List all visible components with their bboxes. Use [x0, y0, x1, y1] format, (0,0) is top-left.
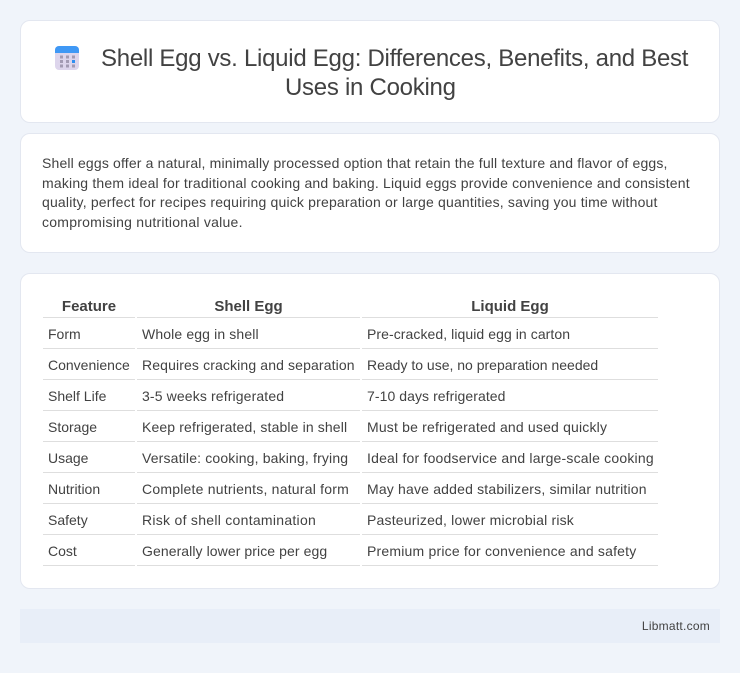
row: Usage: Versatile: cooking, baking, frying [142, 450, 348, 466]
row: Safety: Pasteurized, lower microbial risk [367, 512, 574, 528]
table header: Feature [62, 298, 116, 315]
panel: comparison table [20, 273, 720, 589]
row: Convenience: Requires cracking and separation [142, 357, 355, 373]
row: Usage [48, 450, 654, 466]
row: Cost [48, 543, 636, 559]
row: Storage [48, 419, 607, 435]
row: Usage: Usage [48, 450, 88, 466]
row: Convenience: Convenience [48, 357, 130, 373]
table header: Shell Egg [214, 298, 283, 315]
row: Safety [48, 512, 574, 528]
row: Safety: Risk of shell contamination [142, 512, 316, 528]
intro paragraph: compromising nutritional value. [42, 214, 243, 230]
table header: Liquid Egg [471, 298, 549, 315]
icon: calendar [55, 46, 79, 70]
title: Uses in Cooking [285, 74, 456, 101]
intro paragraph: making them ideal for traditional cooking and baking. Liquid eggs provide convenience and consistent [42, 175, 690, 191]
row: Safety: Safety [48, 512, 88, 528]
table header [62, 298, 549, 315]
row: Shelf Life: Shelf Life [48, 388, 106, 404]
row: Storage: Must be refrigerated and used quickly [367, 419, 607, 435]
panel: intro text [20, 133, 720, 253]
title [101, 45, 688, 101]
intro paragraph: quality, perfect for recipes requiring quick preparation or large quantities, saving you time without [42, 194, 658, 210]
title: Shell Egg vs. Liquid Egg: Differences, Benefits, and Best [101, 45, 688, 72]
intro paragraph: Shell eggs offer a natural, minimally processed option that retain the full texture and flavor of eggs, [42, 155, 668, 171]
row: Storage: Storage [48, 419, 97, 435]
footer bar [20, 609, 720, 643]
row: Shelf Life [48, 388, 506, 404]
row: Form: Form [48, 326, 81, 342]
row: Shelf Life: 3-5 weeks refrigerated [142, 388, 284, 404]
row: Form: Whole egg in shell [142, 326, 259, 342]
row: Nutrition: Nutrition [48, 481, 100, 497]
row: Cost: Generally lower price per egg [142, 543, 327, 559]
row: Usage: Ideal for foodservice and large-scale cooking [367, 450, 654, 466]
row: Form [48, 326, 570, 342]
row: Convenience [48, 357, 598, 373]
row: Storage: Keep refrigerated, stable in shell [142, 419, 347, 435]
row: Shelf Life: 7-10 days refrigerated [367, 388, 506, 404]
row: Nutrition: May have added stabilizers, similar nutrition [367, 481, 647, 497]
panel: title card [20, 20, 720, 123]
row: Cost: Premium price for convenience and safety [367, 543, 636, 559]
row: Nutrition [48, 481, 647, 497]
row: Nutrition: Complete nutrients, natural form [142, 481, 349, 497]
row: Convenience: Ready to use, no preparation needed [367, 357, 598, 373]
row: Cost: Cost [48, 543, 77, 559]
intro paragraph [42, 155, 690, 230]
footer credit: Libmatt.com [642, 619, 710, 633]
row: Form: Pre-cracked, liquid egg in carton [367, 326, 570, 342]
